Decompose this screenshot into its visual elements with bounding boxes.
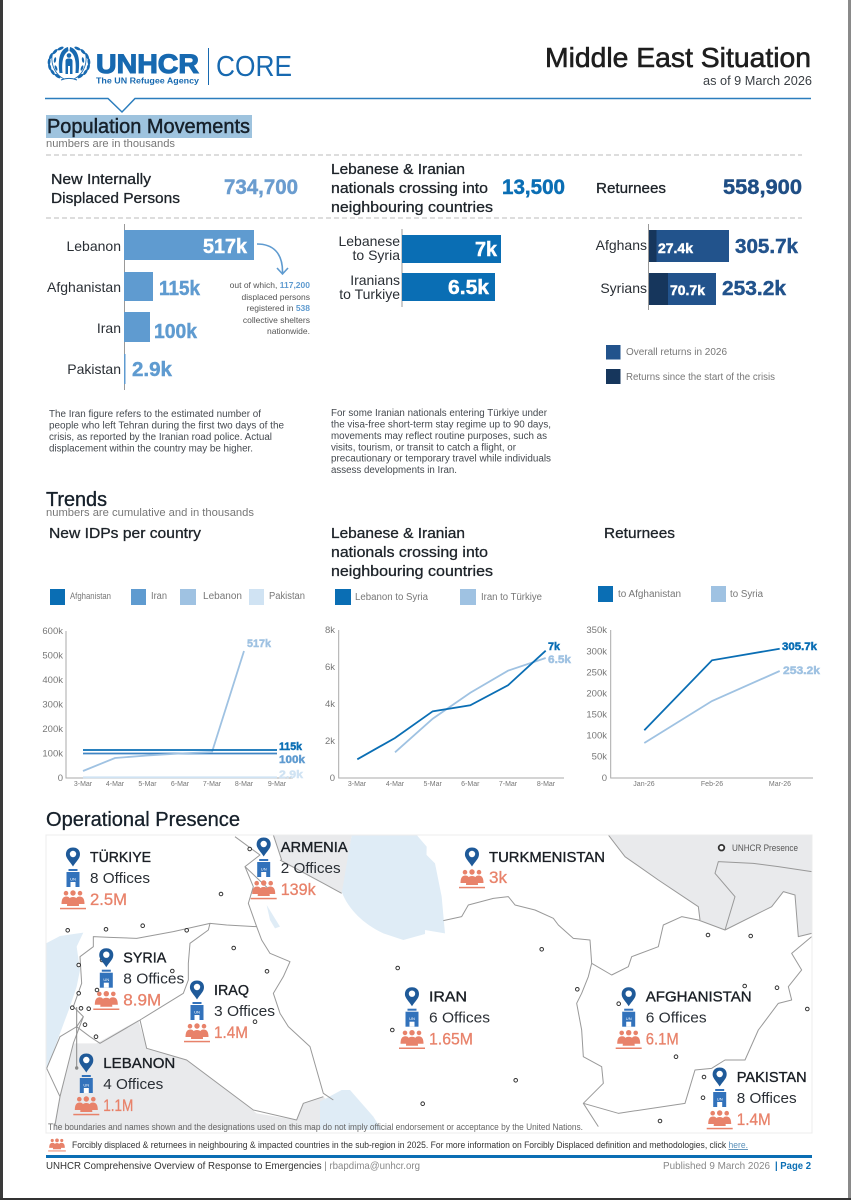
bar chart: IDPs by country: Pakistan: [67, 361, 121, 377]
headline figures: Lebanese & Iranian: [331, 161, 465, 178]
country: Lebanon: LEBANON: [103, 1055, 175, 1072]
country: Turkmenistan: [459, 848, 605, 888]
icon: people: [48, 1139, 66, 1151]
line chart: returnees: 305.7k: [782, 641, 818, 653]
bar chart: IDPs by country: 2.9k: [132, 359, 173, 381]
legend: returnees bars: Returns since the start of the crisis: [626, 372, 775, 383]
legend: IDPs chart: [50, 589, 305, 605]
Lebanon leader line: [75, 1007, 78, 1070]
map east: neighbours and borders: [423, 835, 812, 1127]
legend: IDPs chart: Lebanon: [203, 591, 242, 602]
country: Pakistan: [707, 1068, 807, 1129]
bar chart: IDPs by country: Iran: [97, 320, 121, 336]
legend: crossing chart: Lebanon to Syria: [355, 592, 428, 603]
line chart: returnees: 200k: [586, 688, 607, 699]
bar chart: returnees: 70.7k: [670, 282, 705, 298]
header rule with chevron: [45, 98, 811, 112]
chart heading: crossing: Lebanese & Iranian: [331, 525, 465, 542]
map: operational presence: [40, 835, 812, 1133]
bar chart: returnees: 253.2k: [722, 278, 787, 300]
headline figures: Displaced Persons: [51, 190, 180, 207]
text block: Iran note: crisis, as reported by the Iranian road police. Actual: [49, 432, 272, 443]
bar chart: IDPs by country: Lebanon: [66, 238, 121, 254]
headline figures: neighbouring countries: [331, 199, 493, 216]
country: Iran: IRAN: [429, 989, 467, 1006]
line chart: new IDPs: 9-Mar: [268, 781, 287, 788]
legend: returnees bars: Overall returns in 2026: [626, 347, 727, 358]
country: Afghanistan: UN: [626, 1016, 632, 1021]
headline figures: 734,700: [224, 176, 298, 199]
headline figures: Returnees: [596, 180, 666, 197]
legend: IDPs chart: Pakistan: [269, 591, 305, 602]
logo wordmark: The UN Refugee Agency: [96, 76, 199, 86]
headline figures: nationals crossing into: [331, 180, 488, 197]
legend: returnees chart: [598, 586, 763, 602]
country: Syria: SYRIA: [123, 950, 166, 967]
headline figures: New Internally: [51, 171, 152, 188]
line chart: returnees: [586, 625, 821, 788]
bar chart: nationals crossing: to Turkiye: [339, 286, 400, 302]
line chart: new IDPs: 100k: [279, 754, 306, 766]
text block: Türkiye note: precautionary or temporary travel while individuals: [331, 454, 551, 464]
legend: UNHCR presence: UNHCR Presence: [732, 843, 798, 853]
section: population movements heading: numbers are in thousands: [46, 138, 176, 150]
chart heading: crossing: nationals crossing into: [331, 544, 488, 561]
line chart: crossing: 7-Mar: [499, 781, 518, 788]
line chart: returnees: 50k: [592, 752, 607, 763]
legend: IDPs chart: Iran: [151, 591, 167, 602]
chart heading: IDPs: New IDPs per country: [49, 525, 202, 542]
chart heading: crossing: neighbouring countries: [331, 563, 493, 580]
text block: Türkiye note: visits, tourism, or transit to catch a flight, or: [331, 442, 517, 454]
bar chart: IDPs by country: Afghanistan: [47, 279, 121, 295]
line chart: new IDPs: 7-Mar: [203, 781, 222, 788]
line chart: returnees: 250k: [586, 668, 607, 679]
callout: collective shelters: displaced persons: [241, 292, 310, 302]
line chart: crossing: 2k: [325, 736, 335, 747]
line chart: new IDPs: 200k: [42, 724, 63, 735]
text block: Türkiye note: For some Iranian nationals entering Türkiye under: [331, 408, 548, 419]
section: trends heading: [46, 489, 255, 519]
callout: collective shelters: [230, 280, 310, 336]
line chart: new IDPs: 6-Mar: [171, 781, 190, 788]
map disclaimer: The boundaries and names shown and the designations used on this map do not imply official endorsement or acceptance by the United Nations.: [48, 1122, 583, 1132]
line chart: crossing: 4-Mar: [386, 781, 405, 788]
country: Türkiye: 8 Offices: [90, 870, 150, 887]
title: Middle East Situation: [545, 42, 811, 73]
line chart: new IDPs: 0: [58, 773, 63, 784]
bar chart: IDPs by country: 115k: [159, 278, 201, 300]
text block: Türkiye note: assess developments in Iran.: [331, 465, 457, 476]
line chart: returnees: Feb-26: [701, 781, 723, 788]
country: Türkiye: UN: [70, 876, 76, 882]
country: Iran: 1.65M: [429, 1030, 473, 1049]
presence markers: [66, 847, 809, 1123]
line chart: crossing: 8-Mar: [537, 781, 556, 788]
line chart: new IDPs: 115k: [279, 741, 303, 753]
section: population movements heading: Population Movements: [47, 116, 250, 138]
line chart: returnees: Mar-26: [769, 781, 791, 788]
line chart: crossing: 6k: [325, 662, 335, 673]
line chart: crossing: 4k: [325, 699, 335, 710]
text block: Iran note: people who left Tehran during the first two days of the: [49, 420, 284, 432]
icon: UNHCR emblem: [47, 46, 91, 80]
logo wordmark: [96, 48, 292, 86]
country: Lebanon: [73, 1054, 175, 1115]
country: Pakistan: UN: [717, 1096, 723, 1102]
bar chart: nationals crossing: to Syria: [353, 247, 400, 263]
callout: collective shelters: collective shelters: [243, 315, 310, 325]
bar chart: nationals crossing: Iranians: [350, 272, 400, 288]
country: Iraq: 3 Offices: [214, 1003, 275, 1020]
footer: UNHCR Comprehensive Overview of Response to Emergencies | rbapdima@unhcr.org: [46, 1160, 420, 1172]
country: Lebanon: 4 Offices: [103, 1076, 163, 1093]
bar chart: IDPs by country: 517k: [203, 236, 248, 258]
country: Pakistan: 8 Offices: [737, 1090, 797, 1107]
line chart: crossing: 7k: [548, 641, 561, 653]
line chart: returnees: 100k: [586, 731, 607, 742]
bar chart: IDPs by country: [47, 224, 254, 390]
country: Afghanistan: 6.1M: [646, 1030, 679, 1049]
line chart: crossing: 6.5k: [548, 654, 572, 666]
line chart: new IDPs: 4-Mar: [106, 781, 125, 788]
country: Armenia: ARMENIA: [281, 839, 348, 856]
country: Armenia: 139k: [281, 880, 316, 899]
line chart: returnees: 300k: [586, 646, 607, 657]
date: as of 9 March 2026: [703, 73, 812, 88]
line chart: new IDPs: [42, 626, 306, 788]
footer: [46, 1155, 812, 1172]
line chart: crossing: 6-Mar: [461, 781, 480, 788]
logo wordmark: CORE: [216, 51, 292, 83]
headline figures: 558,900: [723, 176, 802, 199]
line chart: crossing: [325, 625, 572, 788]
section: trends heading: Trends: [46, 489, 107, 511]
country: Syria: 8.9M: [123, 991, 161, 1010]
text block: Türkiye note: [331, 408, 551, 476]
country: Lebanon: UN: [83, 1082, 89, 1088]
callout: collective shelters: registered in 538: [247, 303, 310, 313]
text block: Iran note: [49, 409, 284, 454]
chart heading: returnees: Returnees: [604, 525, 675, 542]
line chart: new IDPs: 100k: [42, 748, 63, 760]
bar chart: nationals crossing: 6.5k: [448, 277, 490, 299]
bar chart: returnees: 27.4k: [658, 240, 693, 256]
country: Iran: [399, 987, 490, 1049]
logo wordmark: UNHCR: [96, 49, 199, 79]
legend: returnees bars: [606, 345, 775, 384]
legend: UNHCR presence: [710, 840, 804, 855]
country: Pakistan: 1.4M: [737, 1110, 771, 1129]
bar chart: returnees: 305.7k: [735, 236, 799, 258]
line chart: crossing: 8k: [325, 625, 335, 636]
country: Iraq: [184, 980, 275, 1042]
legend: crossing chart: Iran to Türkiye: [481, 592, 542, 603]
bar chart: returnees: [596, 224, 799, 310]
callout: collective shelters: out of which, 117,200: [230, 280, 310, 290]
bar chart: IDPs by country: 100k: [154, 321, 198, 343]
line chart: new IDPs: 400k: [42, 675, 63, 686]
country: Iraq: UN: [194, 1010, 200, 1014]
country: Iran: 6 Offices: [429, 1010, 490, 1027]
line chart: returnees: 150k: [586, 710, 607, 721]
line chart: new IDPs: 600k: [42, 626, 63, 637]
country: Armenia: [251, 838, 348, 899]
line chart: new IDPs: 517k: [247, 638, 272, 650]
footnote: Forcibly displaced & returnees in neighbouring & impacted countries in the sub-region in 2025. For more information on Forcibly Displaced definition and methodologies, click here.: [72, 1140, 748, 1150]
text block: Iran note: displacement within the country may be higher.: [49, 444, 253, 454]
headline figures: [46, 155, 802, 218]
line chart: crossing: 0: [330, 773, 335, 784]
line chart: returnees: 253.2k: [783, 665, 821, 677]
country: Türkiye: TÜRKIYE: [90, 848, 151, 866]
line chart: new IDPs: 500k: [42, 650, 63, 662]
section: population movements heading: [46, 115, 252, 150]
country: Türkiye: [60, 848, 151, 909]
legend: returnees chart: to Afghanistan: [618, 589, 681, 600]
header: [45, 42, 812, 112]
country: Syria: UN: [103, 977, 109, 982]
country: Afghanistan: AFGHANISTAN: [646, 989, 752, 1006]
country: Syria: [93, 948, 184, 1010]
country: Turkmenistan: TURKMENISTAN: [489, 849, 605, 866]
country: Pakistan: PAKISTAN: [737, 1069, 807, 1086]
footer: Published 9 March 2026: [663, 1160, 770, 1172]
line chart: new IDPs: 8-Mar: [235, 781, 254, 788]
country: Afghanistan: 6 Offices: [646, 1010, 707, 1027]
country: Armenia: 2 Offices: [281, 860, 341, 877]
country: Lebanon: 1.1M: [103, 1096, 133, 1115]
bar chart: returnees: Afghans: [596, 237, 647, 253]
line chart: crossing: 5-Mar: [424, 781, 443, 788]
country: Turkmenistan: 3k: [489, 868, 507, 887]
legend: IDPs chart: Afghanistan: [70, 591, 111, 602]
bar chart: nationals crossing: 7k: [475, 239, 498, 261]
bar chart: nationals crossing: Lebanese: [338, 233, 400, 249]
map west: seas, neighbours and borders: [40, 835, 427, 1130]
country: Armenia: UN: [261, 866, 267, 872]
arrow: Lebanon callout: [257, 244, 288, 274]
text block: Türkiye note: movements may reflect routine purposes, such as: [331, 431, 547, 442]
section: operational presence heading: Operational Presence: [46, 809, 240, 831]
bar chart: returnees: Syrians: [600, 280, 647, 296]
country: Syria: 8 Offices: [123, 971, 184, 988]
legend: crossing chart: [335, 589, 542, 605]
country: Türkiye: 2.5M: [90, 890, 127, 909]
footer: | Page 2: [775, 1160, 811, 1172]
callout: collective shelters: nationwide.: [267, 326, 310, 336]
country: Iraq: 1.4M: [214, 1023, 248, 1042]
line chart: new IDPs: 5-Mar: [138, 781, 157, 788]
line chart: new IDPs: 300k: [42, 700, 63, 710]
legend: returnees chart: to Syria: [730, 589, 763, 600]
bar chart: nationals crossing: [338, 229, 501, 307]
country: Iraq: IRAQ: [214, 982, 249, 999]
line chart: returnees: 0: [602, 773, 607, 784]
chart heading: crossing: [331, 525, 493, 580]
line chart: new IDPs: 2.9k: [279, 769, 304, 781]
line chart: returnees: Jan-26: [633, 781, 655, 788]
country: Afghanistan: [616, 987, 752, 1049]
line chart: new IDPs: 3-Mar: [74, 781, 93, 788]
section: trends heading: numbers are cumulative and in thousands: [46, 507, 255, 519]
headline figures: 13,500: [502, 176, 565, 199]
text block: Türkiye note: the visa-free short-term stay regime up to 90 days,: [331, 420, 551, 430]
line chart: crossing: 3-Mar: [348, 781, 367, 788]
text block: Iran note: The Iran figure refers to the estimated number of: [49, 409, 261, 420]
country: Iran: UN: [409, 1016, 415, 1021]
line chart: returnees: 350k: [586, 625, 607, 636]
